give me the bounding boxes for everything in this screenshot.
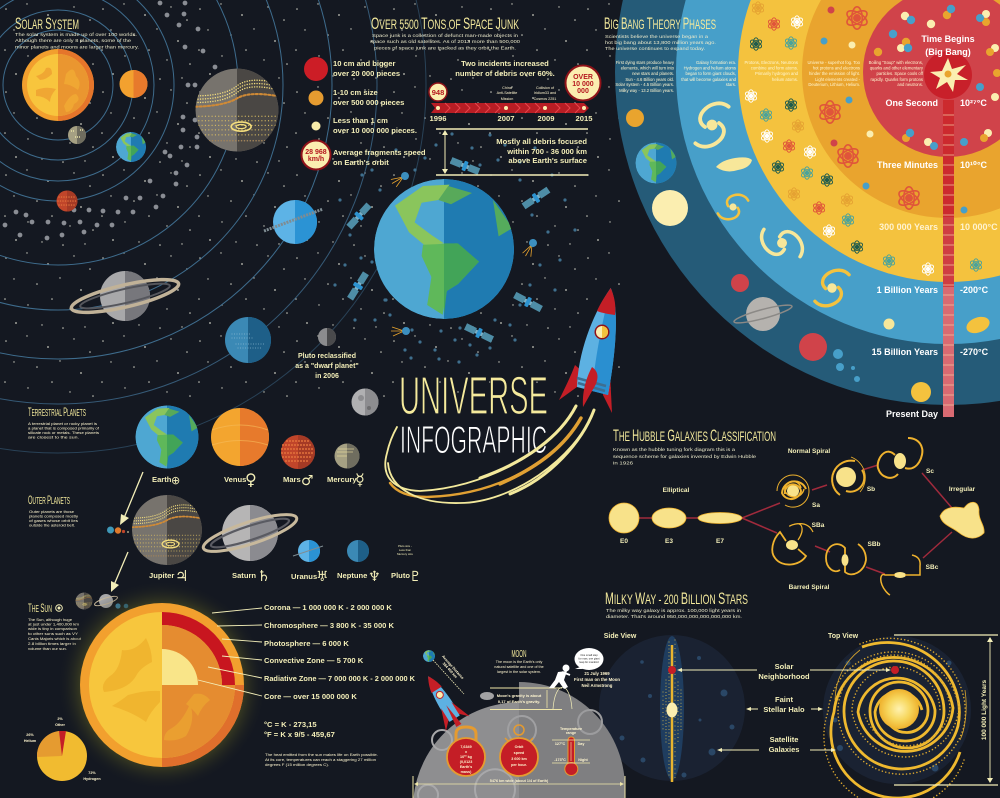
time labels: (Big Bang)	[925, 47, 971, 57]
phase text: stars: new stars and planets.	[632, 71, 674, 76]
outer labels: ♇	[409, 569, 422, 585]
time labels: 10²⁷°C	[960, 98, 987, 108]
speed badge: Average fragments speed	[333, 148, 426, 157]
moon thermometer: 127°C	[555, 742, 565, 746]
hubble labels: Sb	[867, 486, 875, 493]
sun heat note: At its core, temperatures can reach a staggering 27 million	[265, 758, 376, 762]
sun composition pie: 72%	[88, 771, 96, 775]
time labels: Present Day	[886, 409, 938, 419]
sun layer labels	[264, 603, 416, 701]
galaxy callouts: Satellite	[770, 735, 798, 744]
mars	[56, 190, 78, 212]
phase text: fog: Universe - superhot fog. Too	[807, 60, 861, 65]
galaxies in blue ring	[684, 99, 992, 336]
sun in solar system	[22, 49, 94, 121]
speech bubble: for man, one giant	[579, 656, 600, 660]
moon thermometer: Day	[578, 742, 585, 746]
milky way view labels: Top View	[828, 633, 859, 640]
moon thermometer: range	[566, 731, 576, 735]
hubble labels: SBa	[812, 522, 825, 529]
phase text: atoms	[744, 60, 799, 82]
big bang description: hot big bang about 13,800 million years ago.	[605, 40, 716, 46]
outer labels: Neptune	[337, 571, 367, 580]
moon mass weight: x	[465, 750, 468, 754]
diameter marker	[894, 635, 998, 785]
moon mass weight: 10²² kg	[460, 755, 472, 759]
sun composition pie	[24, 717, 101, 781]
debris cloud	[335, 134, 575, 362]
phase text: galaxies: began to form giant clouds,	[685, 71, 736, 76]
mercury	[334, 444, 360, 468]
title	[399, 366, 548, 462]
debris timeline	[430, 86, 593, 123]
10 million badge	[566, 66, 600, 100]
milky way view labels	[604, 633, 859, 640]
pluto size note: Mercury size	[397, 552, 413, 556]
terrestrial description: A terrestrial planet or rocky planet is	[28, 422, 97, 426]
moon description: largest in the solar system.	[497, 670, 541, 674]
moon description: natural satellite and one of the	[494, 665, 544, 669]
milky way description: diameter. That's around 950,000,000,000,000,000 km.	[606, 614, 742, 620]
big bang burst	[924, 51, 972, 99]
terrestrial labels: Mercury	[327, 475, 357, 484]
phase text: soup: Boiling "Soup" with electrons,	[869, 60, 923, 65]
time labels: 10¹⁰°C	[960, 160, 988, 170]
heading: the sun: THE SUN	[28, 601, 52, 615]
title: UNIVERSE	[399, 366, 548, 426]
outer description: planets composed mostly	[29, 514, 78, 518]
neptune	[225, 317, 271, 363]
speech bubble	[574, 648, 604, 670]
pluto note: as a "dwarf planet"	[295, 363, 359, 370]
phase text: atoms: Primarily hydrogen and	[755, 71, 799, 76]
galaxy callouts	[758, 662, 810, 754]
hubble labels: Elliptical	[663, 487, 690, 494]
time labels: 300 000 Years	[879, 222, 938, 232]
phase text: fog	[807, 60, 861, 87]
pluto note: in 2006	[315, 373, 339, 380]
outer labels: Jupiter	[149, 571, 174, 580]
948 badge	[429, 83, 447, 101]
saturn	[200, 505, 300, 561]
heading: solar system: SOLAR SYSTEM	[15, 14, 79, 33]
galaxy callouts: Faint	[775, 695, 793, 704]
debris timeline: Anti-Satellite	[497, 91, 517, 95]
sun layer labels: Convective Zone — 5 700 K	[264, 656, 364, 665]
heading: hubble: THE HUBBLE GALAXIES CLASSIFICATION	[613, 426, 776, 445]
sun description: wide is tiny in comparison	[28, 627, 77, 631]
earth small	[116, 132, 146, 162]
big bang description	[605, 34, 716, 52]
space junk description	[370, 33, 520, 52]
speed badge: on Earth's orbit	[333, 158, 389, 167]
phase text: galaxies: Galaxy formation era.	[696, 60, 736, 65]
time labels: 15 Billion Years	[872, 347, 938, 357]
galaxy callouts: Stellar Halo	[763, 705, 805, 714]
hubble labels: E3	[665, 538, 673, 545]
incidents note	[455, 59, 555, 78]
time labels: One Second	[885, 98, 938, 108]
sun layer labels: Chromosphere — 3 800 K - 35 000 K	[264, 621, 395, 630]
neptune	[347, 540, 369, 562]
phase text: fog: Light elements created -	[815, 77, 861, 82]
tiny earth and distance	[423, 650, 465, 694]
venus	[120, 70, 148, 98]
particle dots	[820, 5, 1000, 213]
debris size legend: over 10 000 000 pieces.	[333, 126, 417, 135]
incidents note: Two incidents increased	[461, 59, 549, 68]
moon thermometer	[552, 727, 590, 776]
debris size legend: 10 cm and bigger	[333, 59, 396, 68]
moon landing text: First man on the Moon	[574, 677, 620, 682]
galaxy callouts: Galaxies	[769, 745, 799, 754]
orbit speed stopwatch: per hour.	[511, 763, 527, 767]
debris timeline: 2007	[498, 114, 514, 123]
diameter marker: 100 000 Light Years	[981, 680, 988, 740]
phase text: galaxies: stars.	[726, 82, 736, 87]
outer description: Outer planets are those	[29, 510, 74, 514]
terrestrial description: are closest to the sun.	[28, 436, 79, 440]
heading: space junk: OVER 5500 TONS OF SPACE JUNK	[371, 14, 519, 33]
arrow outer scale	[111, 552, 128, 592]
phase text: stars	[615, 60, 675, 93]
phase text: soup	[869, 60, 924, 87]
altitude range: within 700 - 36 000 km	[506, 147, 587, 156]
altitude range	[436, 129, 588, 175]
mercury	[68, 126, 86, 144]
hubble labels: Sc	[926, 468, 934, 475]
moon width arrow	[413, 776, 625, 798]
altitude range: above Earth's surface	[508, 156, 587, 165]
outer labels: ♅	[316, 569, 329, 585]
galaxy callouts: Solar	[775, 662, 793, 671]
hubble labels: SBc	[926, 564, 939, 571]
debris size legend: over 500 000 pieces	[333, 98, 404, 107]
moon gravity	[490, 687, 572, 710]
speed badge: 28 968	[305, 149, 327, 156]
phase text: fog: Deuterium, Lithium, Helium.	[808, 82, 860, 87]
mars	[281, 435, 315, 469]
tiny outer planets	[76, 592, 128, 610]
time labels: Three Minutes	[877, 160, 938, 170]
atoms	[744, 2, 983, 275]
debris timeline: 1996	[430, 114, 446, 123]
sun layer labels: Corona — 1 000 000 K - 2 000 000 K	[264, 603, 392, 612]
tiny earth and distance: Average Distance	[441, 655, 465, 680]
temperature formula: °F = K x 9/5 - 459,67	[264, 730, 335, 739]
earth	[136, 406, 198, 468]
space junk description: Space junk is a collection of defunct man-made objects in	[372, 33, 518, 39]
jupiter	[132, 495, 202, 565]
milky way view labels: Side View	[604, 633, 637, 640]
10 million badge: 000	[577, 88, 589, 95]
spiral galaxies normal	[777, 438, 922, 507]
sun composition pie: Other	[55, 723, 65, 727]
tuning fork lines	[639, 465, 952, 574]
debris timeline: Iridium33 and	[534, 91, 556, 95]
rocket swoosh	[385, 406, 594, 503]
sun description	[28, 618, 81, 651]
temperature formula: °C = K - 273,15	[264, 720, 317, 729]
time labels	[872, 34, 998, 419]
terrestrial labels: Mars	[283, 475, 301, 484]
sun layer leader lines	[198, 608, 262, 696]
spiral galaxies barred	[772, 524, 920, 595]
terrestrial labels: Earth	[152, 475, 172, 484]
phase text: atoms: combine and form atoms.	[751, 66, 798, 70]
objects in outer ring	[626, 109, 931, 402]
venus	[211, 408, 269, 466]
10 million badge: 10 000	[572, 81, 594, 88]
hubble description: sequence scheme for galaxies invented by Edwin Hubble	[613, 454, 756, 460]
sun symbol	[56, 605, 62, 611]
phase text: soup: rapidly. Quarks form protons	[870, 77, 923, 82]
milky way description: The milky way galaxy is approx. 100,000 light years in	[606, 608, 741, 614]
incidents note: number of debris over 60%.	[455, 69, 555, 78]
space junk description: space such as old satellites. As of 2013 more than 500,000	[370, 39, 520, 45]
phase text: stars: Milky way - 13.2 Billion years.	[619, 88, 674, 93]
big bang description: The universe continues to expand today.	[605, 46, 705, 52]
moon mass weight: mass)	[461, 770, 472, 774]
sun cutaway	[57, 580, 267, 790]
pluto note: Pluto reclassified	[298, 353, 356, 360]
sun layer labels: Core — over 15 000 000 K	[264, 692, 357, 701]
outer labels: Pluto	[391, 571, 410, 580]
hubble labels: Sa	[812, 502, 820, 509]
debris timeline: China	[502, 86, 513, 90]
debris size legend: over 20 000 pieces	[333, 69, 400, 78]
pluto	[318, 328, 336, 346]
outer labels	[149, 567, 422, 585]
tiny terrestrial planets	[107, 526, 129, 534]
phase text: soup: and neutrons.	[897, 82, 923, 87]
moon thermometer: Temperature	[560, 727, 582, 731]
orbits	[0, 0, 426, 453]
elliptical galaxies	[609, 503, 742, 533]
phase text: atoms: Protons, Electrons, Neutrons	[744, 60, 798, 65]
heading: milky way: MILKY WAY - 200 BILLION STARS	[605, 589, 748, 608]
orbit speed stopwatch	[500, 725, 538, 776]
outer description: outside the asteroid belt.	[29, 524, 75, 528]
solar system description: Although there are only 8 planets, some of the	[15, 38, 131, 44]
debris size legend: 1-10 cm size	[333, 88, 378, 97]
debris timeline: Cosmos 2251	[534, 97, 556, 101]
phase text: soup: particles. Space cools off	[877, 71, 924, 76]
satellites	[345, 156, 551, 344]
phase text: fog: hot protons and electrons	[813, 66, 860, 70]
hubble description	[613, 447, 756, 466]
irregular galaxy	[940, 502, 984, 538]
solar system description: minor planets and moons are larger than mercury.	[15, 44, 139, 50]
terrestrial labels	[152, 470, 365, 489]
time labels: Time Begins	[921, 34, 975, 44]
time scale bar	[943, 100, 954, 417]
pluto size note: Pluto size -	[398, 544, 412, 548]
debris timeline: Mission	[501, 97, 513, 101]
title: INFOGRAPHIC	[400, 419, 547, 462]
orbit speed stopwatch: 3 600 km	[511, 757, 528, 761]
phase text: stars: First dying stars produce heavy	[616, 60, 675, 65]
phase text: stars: Solar system - 4.5 Billion years.	[615, 82, 674, 87]
time labels: -270°C	[960, 347, 989, 357]
sun heat note: degrees F (15 million degrees C).	[265, 763, 329, 767]
phase text: fog: hinder the emission of light.	[809, 71, 860, 76]
infographic canvas: MOON	[512, 649, 526, 660]
terrestrial description	[28, 422, 100, 440]
hubble labels: Barred Spiral	[789, 584, 830, 591]
uranus	[293, 540, 323, 562]
time labels: 1 Billion Years	[877, 285, 938, 295]
debris timeline: 2009	[538, 114, 554, 123]
outer labels: Saturn	[232, 571, 256, 580]
pluto size note	[397, 544, 413, 556]
hubble labels: E0	[620, 538, 628, 545]
sun description: to other suns such as VY	[28, 632, 79, 636]
top view galaxy	[823, 636, 971, 798]
phase text: galaxies: that will become galaxies and	[681, 77, 737, 82]
saturn in ring	[733, 297, 793, 331]
callout arrows	[677, 668, 891, 752]
10 million badge: OVER	[573, 74, 593, 81]
terrestrial labels: Venus	[224, 475, 246, 484]
sun description: 2.8 billion times larger in	[28, 642, 76, 646]
galaxy callouts: Neighborhood	[758, 672, 810, 681]
heading: big bang: BIG BANG THEORY PHASES	[604, 14, 716, 33]
pluto note	[295, 353, 359, 380]
debris timeline: Collision of	[536, 86, 555, 90]
debris size legend	[304, 57, 417, 135]
moon mass weight: (0,0123	[460, 760, 472, 764]
hubble description: Known as the hubble tuning fork diagram this is a	[613, 447, 735, 453]
terrestrial labels: ☿	[355, 470, 365, 489]
speed badge: km/h	[308, 156, 324, 163]
phase text: soup: quarks and other elementary	[870, 66, 924, 70]
sun composition pie: 2%	[57, 717, 63, 721]
hubble labels: SBb	[868, 541, 881, 548]
orbit speed stopwatch: speed	[514, 751, 525, 755]
solar system description: The solar system is made up of over 100 worlds.	[15, 32, 137, 38]
space junk description: pieces of space junk are tracked as they orbit the Earth.	[374, 46, 516, 52]
hubble description: in 1926	[613, 460, 633, 466]
milky way description	[606, 608, 742, 620]
uranus	[264, 200, 323, 244]
big bang rings	[615, 0, 1000, 405]
phase text: galaxies: Hydrogen and helium atoms	[684, 66, 736, 70]
moon description	[494, 660, 544, 674]
terrestrial labels: ⊕	[171, 474, 180, 487]
hubble labels: E7	[716, 538, 724, 545]
phase text: galaxies	[681, 60, 737, 87]
outer labels: Uranus	[291, 572, 317, 581]
altitude range: Mostly all debris focused	[496, 137, 587, 146]
star field	[0, 0, 620, 405]
terrestrial labels: ♂	[301, 473, 314, 489]
outer labels: ♃	[175, 567, 188, 585]
debris size legend: Less than 1 cm	[333, 116, 388, 125]
sun description: The Sun, although huge	[28, 618, 72, 622]
moon mass weight	[447, 727, 485, 776]
rocket	[559, 288, 616, 413]
hubble labels: Irregular	[949, 486, 976, 493]
terrestrial description: silicate rock or metals. These planets	[28, 431, 99, 435]
moon description: The moon is the Earth's only	[496, 660, 542, 664]
arrow earth scale	[120, 472, 143, 525]
moon landing text: Neil Armstrong	[582, 683, 613, 688]
moon mass weight: Earth's	[460, 765, 472, 769]
sun description: at just under 1,400,000 km	[28, 622, 79, 626]
saturn	[69, 271, 181, 321]
phase text: atoms: helium atoms.	[772, 77, 798, 82]
tiny earth and distance: 384 400 km	[442, 662, 458, 680]
sun composition pie: 26%	[26, 733, 34, 737]
sun layer labels: Photosphere — 6 000 K	[264, 639, 349, 648]
solar system description	[15, 32, 139, 50]
hubble labels	[620, 448, 976, 591]
sun heat note	[265, 753, 378, 767]
terrestrial description: a planet that is composed primarily of	[28, 426, 100, 430]
terrestrial labels: ♀	[245, 470, 257, 489]
moon gravity: Moon's gravity is about	[497, 693, 542, 698]
outer description: of gases whose orbit lies	[29, 519, 78, 523]
sun layer labels: Radiative Zone — 7 000 000 K - 2 000 000 K	[264, 674, 416, 683]
speed badge	[302, 140, 426, 170]
jupiter	[196, 68, 278, 152]
debris timeline: 2015	[576, 114, 593, 123]
speech bubble: leap for mankind	[579, 660, 599, 664]
sun composition pie: Hydrogen	[83, 777, 101, 781]
moon width arrow: 5476 km wide (about 1/4 of Earth)	[490, 779, 549, 783]
moon thermometer: -173°C	[554, 758, 566, 762]
side view galaxy	[599, 635, 745, 782]
heading: terrestrial planets: TERRESTRIAL PLANETS	[28, 405, 86, 419]
pluto size note: Less than	[399, 548, 412, 552]
time labels: 10 000°C	[960, 222, 998, 232]
moon thermometer: Night	[578, 758, 588, 762]
sun heat note: The heat emitted from the sun makes life on Earth possible.	[265, 753, 378, 757]
moon mass weight: 7,6349	[460, 745, 472, 749]
earth large	[374, 179, 514, 319]
moon gravity: 0,17 of Earth's gravity.	[498, 699, 540, 704]
heading: outer planets: OUTER PLANETS	[28, 493, 70, 507]
orbit speed stopwatch: Orbit	[515, 745, 524, 749]
speech bubble: One small step	[580, 653, 598, 657]
big bang description: Scientists believe the universe began in a	[605, 34, 708, 40]
asteroid belt	[5, 3, 215, 238]
astronaut	[549, 664, 570, 689]
sun composition pie: Helium	[24, 739, 37, 743]
small rocket	[416, 669, 471, 733]
sun description: volume than our sun.	[28, 647, 67, 651]
outer description	[29, 510, 78, 528]
outer labels: ♆	[368, 569, 381, 585]
time labels: -200°C	[960, 285, 989, 295]
moon landing text: 21 July 1969	[584, 671, 610, 676]
hubble labels: Normal Spiral	[788, 448, 830, 455]
phase text: stars: Sun - 4.6 Billion years old.	[625, 77, 674, 82]
948 badge: 948	[432, 88, 444, 97]
outer labels: ♄	[257, 567, 270, 585]
moon landing text	[574, 671, 620, 688]
moon small	[352, 388, 378, 416]
moon body	[414, 682, 625, 798]
temperature formula	[264, 720, 335, 739]
sun description: Canis Majoris which is about	[28, 637, 81, 641]
phase text: stars: elements, which will turn into	[621, 66, 675, 70]
